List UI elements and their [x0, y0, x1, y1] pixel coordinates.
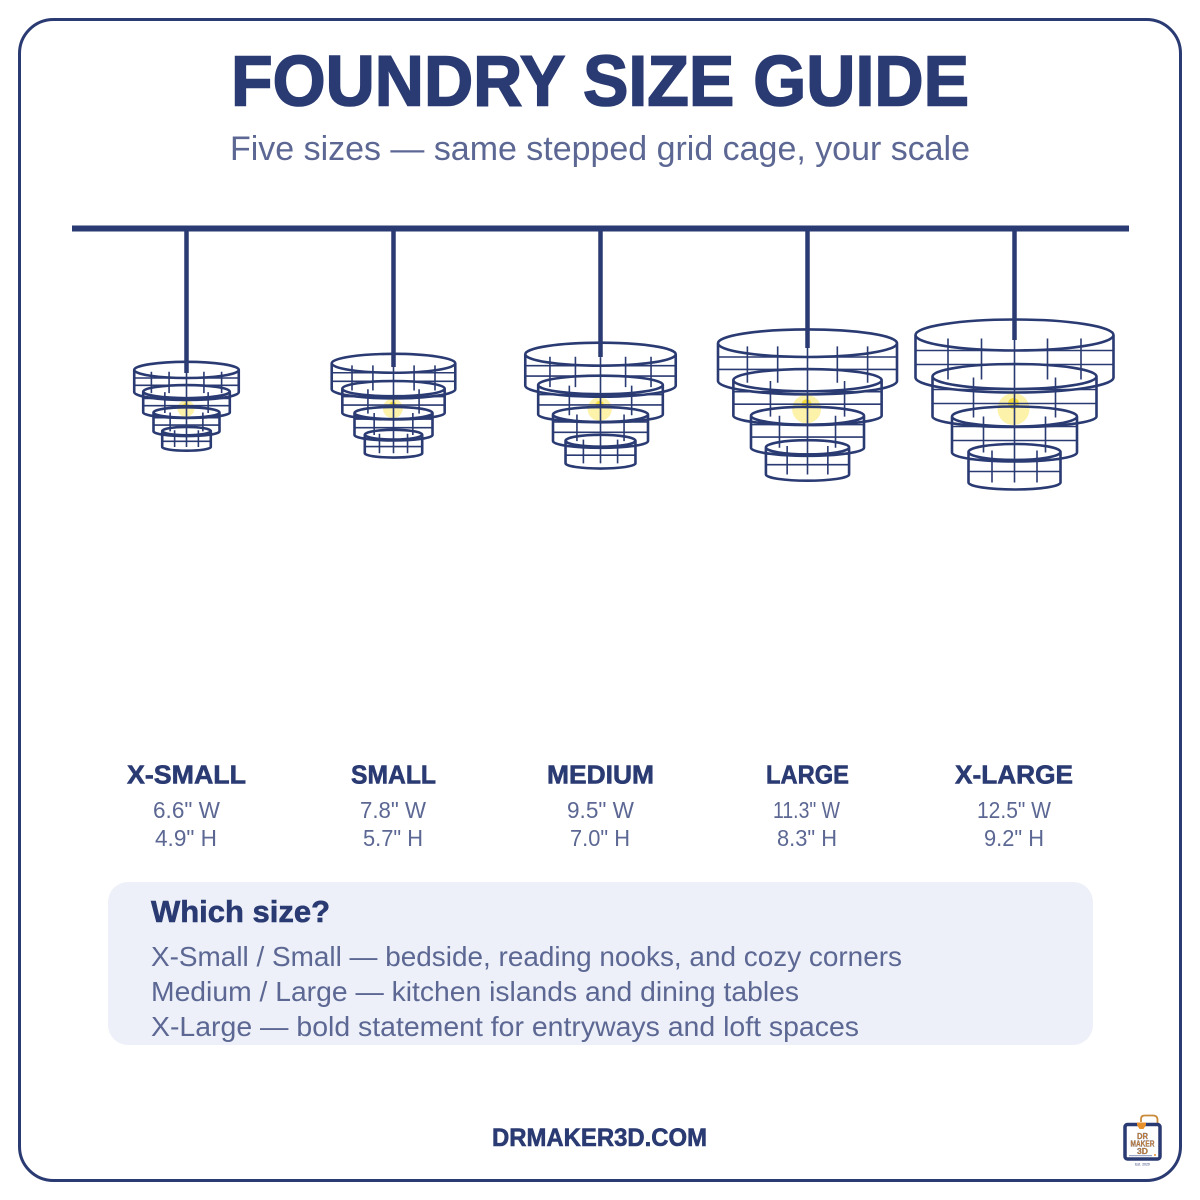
pendant: x-small: [134, 230, 239, 451]
title: FOUNDRY SIZE GUIDE: [231, 42, 969, 122]
hanging rail: [72, 226, 1129, 232]
size label: medium: MEDIUM: [547, 760, 654, 790]
size label: x-large: 9.2" H: [984, 825, 1044, 851]
panel: which size: [108, 882, 1093, 1045]
size label: small: [351, 760, 436, 851]
size label: x-large: [955, 760, 1073, 851]
size label: x-large: X-LARGE: [955, 760, 1073, 790]
size label: x-small: 6.6" W: [153, 797, 220, 823]
icon: Dr Maker 3D logo: MAKER: [1130, 1140, 1155, 1148]
icon: Dr Maker 3D logo: Est. 2020: [1135, 1162, 1150, 1166]
pendant: small: [332, 230, 455, 458]
size label: small: SMALL: [351, 760, 436, 790]
pendant: medium: [525, 230, 676, 469]
size label: small: 5.7" H: [363, 825, 423, 851]
subtitle: Five sizes — same stepped grid cage, your scale: [230, 130, 970, 168]
icon: Dr Maker 3D logo: DR: [1137, 1132, 1148, 1141]
recommendation lines: X-Large — bold statement for entryways and loft spaces: [151, 1011, 859, 1042]
size label: large: 8.3" H: [777, 825, 837, 851]
recommendation lines: X-Small / Small — bedside, reading nooks, and cozy corners: [151, 941, 902, 972]
size label: medium: [547, 760, 654, 851]
footer website: DRMAKER3D.COM: [492, 1124, 707, 1152]
size label: small: 7.8" W: [360, 797, 426, 823]
icon: Dr Maker 3D logo: 3D: [1137, 1147, 1148, 1156]
size label: x-large: 12.5" W: [977, 797, 1051, 823]
size label: large: [766, 760, 849, 851]
recommendation lines: Medium / Large — kitchen islands and dining tables: [151, 976, 799, 1007]
size label: x-small: [127, 760, 246, 851]
size label: x-small: X-SMALL: [127, 760, 246, 790]
size label: large: 11.3" W: [773, 797, 840, 823]
size label: x-small: 4.9" H: [155, 825, 217, 851]
size label: large: LARGE: [766, 760, 849, 790]
pendant: large: [718, 230, 897, 481]
size label: medium: 7.0" H: [570, 825, 630, 851]
panel heading: Which size?: [151, 894, 330, 929]
size label: medium: 9.5" W: [567, 797, 634, 823]
icon: Dr Maker 3D logo: [1125, 1116, 1160, 1166]
recommendation lines: [151, 941, 902, 1042]
pendant: x-large: [916, 230, 1114, 490]
